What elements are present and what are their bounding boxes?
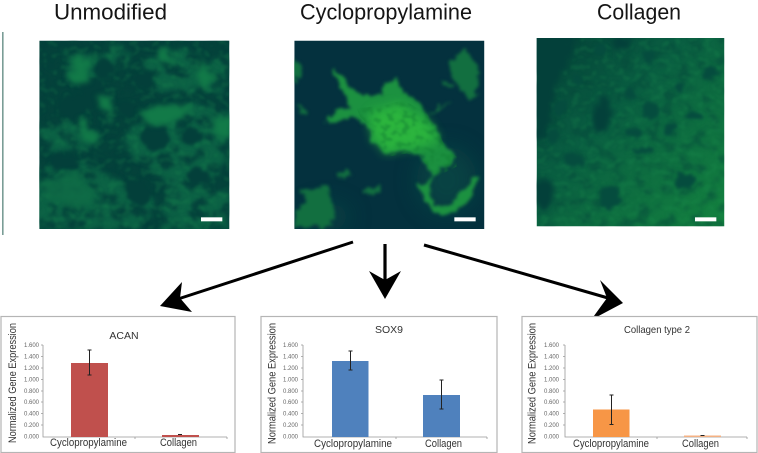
y axis ticks: 0.600: [283, 400, 299, 406]
y axis title: Normalized Gene Expression: [7, 323, 19, 443]
chart title: ACAN: ACAN: [109, 330, 139, 342]
y axis ticks: 0.200: [24, 423, 40, 429]
label: Cyclopropylamine: Cyclopropylamine: [314, 438, 392, 450]
arrow: to SOX9 chart: [369, 244, 401, 299]
y axis ticks: 0.400: [283, 412, 299, 418]
label: Collagen: Collagen: [682, 438, 719, 450]
y axis ticks: 0.800: [283, 389, 299, 395]
y axis ticks: 0.800: [544, 389, 560, 395]
label: Collagen: Collagen: [425, 438, 462, 450]
y axis ticks: 1.000: [544, 378, 560, 384]
micrograph: Unmodified: [37, 40, 230, 230]
y axis ticks: 0.200: [544, 423, 560, 429]
bar: Cyclopropylamine: [71, 363, 108, 437]
bar: Collagen: [423, 395, 460, 437]
arrow: to Collagen type 2 chart: [424, 245, 623, 320]
panel: Collagen type 2 chart: [522, 316, 757, 452]
y axis ticks: 1.600: [24, 343, 40, 349]
y axis ticks: 1.200: [544, 366, 560, 372]
error bar: Collagen: [440, 380, 444, 409]
y axis ticks: 0.400: [24, 412, 40, 418]
y axis ticks: 0.000: [544, 434, 560, 440]
bar: Collagen: [162, 435, 199, 437]
y axis title: Normalized Gene Expression: [526, 323, 538, 444]
bar: Cyclopropylamine: [593, 410, 630, 437]
y axis ticks: 1.600: [544, 343, 560, 349]
label: Collagen: Collagen: [160, 437, 197, 449]
y axis ticks: 0.000: [283, 434, 299, 440]
title: Cyclopropylamine: Cyclopropylamine: [300, 0, 472, 24]
y axis ticks: 1.600: [283, 343, 299, 349]
y axis ticks: 1.200: [283, 366, 299, 372]
error bar: Cyclopropylamine: [348, 351, 352, 370]
error bar: Cyclopropylamine: [610, 395, 614, 424]
y axis ticks: [283, 343, 299, 440]
error bar: Collagen: [700, 434, 704, 436]
y axis ticks: 1.400: [283, 354, 299, 360]
y axis ticks: 0.000: [24, 434, 40, 440]
label: Cyclopropylamine: Cyclopropylamine: [573, 438, 649, 450]
scale bar: [201, 217, 222, 221]
y axis ticks: 0.400: [544, 412, 560, 418]
bar: Collagen: [684, 436, 721, 437]
y axis ticks: 0.200: [283, 423, 299, 429]
title: Unmodified: Unmodified: [54, 0, 167, 24]
error bar: Cyclopropylamine: [88, 350, 92, 375]
y axis ticks: 1.000: [283, 378, 299, 384]
panel: SOX9 chart: [261, 316, 497, 452]
y axis ticks: 0.600: [24, 400, 40, 406]
side rule: [2, 32, 4, 235]
y axis ticks: 1.000: [24, 378, 40, 384]
title: Collagen: Collagen: [597, 0, 681, 24]
micrograph: Collagen: [533, 35, 724, 226]
y axis ticks: 0.800: [24, 389, 40, 395]
axes: [563, 345, 747, 439]
label: Cyclopropylamine: Cyclopropylamine: [50, 437, 127, 449]
axes: [301, 345, 487, 439]
y axis ticks: 1.400: [24, 354, 40, 360]
scale bar: [695, 217, 716, 221]
y axis ticks: [544, 343, 560, 440]
y axis ticks: 1.200: [24, 366, 40, 372]
bar: Cyclopropylamine: [332, 361, 368, 437]
y axis ticks: [24, 343, 40, 440]
panel: ACAN chart: [1, 316, 235, 452]
y axis title: Normalized Gene Expression: [266, 323, 278, 444]
error bar: Collagen: [178, 434, 182, 436]
axes: [41, 345, 227, 439]
chart title: SOX9: SOX9: [375, 324, 403, 336]
chart title: Collagen type 2: Collagen type 2: [624, 324, 690, 336]
y axis ticks: 0.600: [544, 400, 560, 406]
scale bar: [454, 217, 476, 221]
arrow: to ACAN chart: [160, 242, 353, 312]
micrograph: Cyclopropylamine: [290, 41, 484, 230]
y axis ticks: 1.400: [544, 354, 560, 360]
